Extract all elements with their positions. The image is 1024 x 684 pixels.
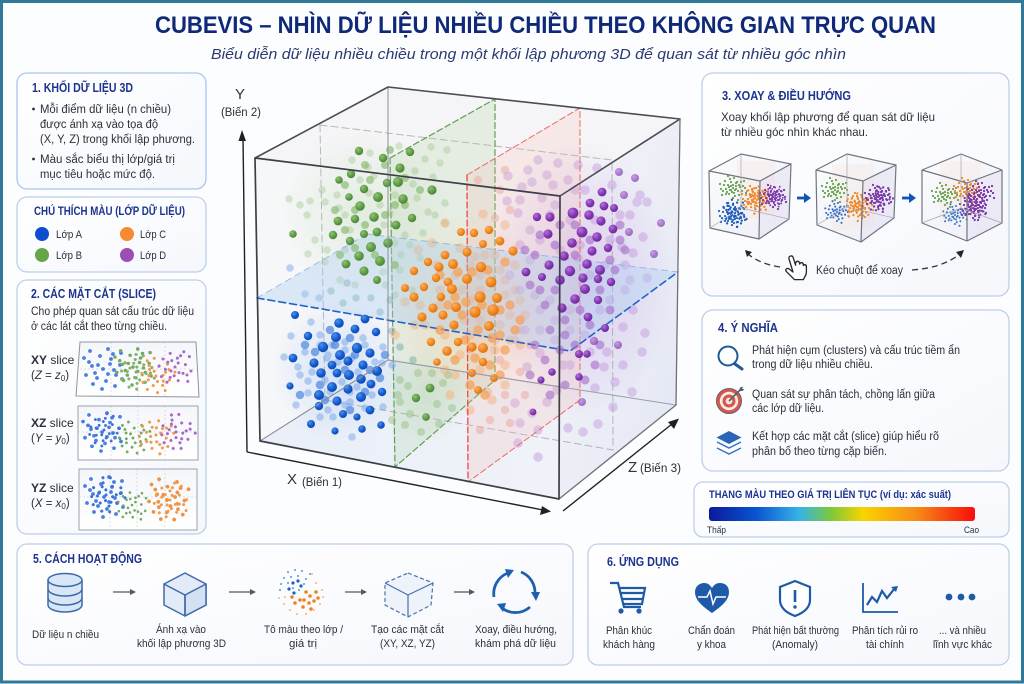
app text: more (933, 625, 992, 651)
YZ slice label: YZ slice (31, 481, 74, 495)
cluster: class B green (289, 147, 437, 421)
X axis label: (Biến 1) (302, 477, 342, 489)
legend: class D: Lớp D (140, 250, 166, 262)
XZ slice label: 0 (61, 437, 66, 446)
mini cube 2 (816, 154, 896, 242)
rotate description: Xoay khối lập phương để quan sát dữ liệu (721, 110, 935, 124)
XZ slice thumbnail (78, 406, 198, 460)
app text: medical: y khoa (697, 639, 727, 651)
text: find clusters: Phát hiện cụm (clusters) và cấu trúc tiềm ẩn (752, 345, 960, 357)
panel: continuous colour scale (694, 482, 1009, 537)
YZ slice label: (X = x (31, 498, 61, 510)
icon: heart (695, 583, 729, 613)
Y axis label: Y (235, 86, 245, 103)
panel: 4 meaning (702, 310, 1009, 471)
main chart: 3D data cube (221, 86, 681, 515)
rotate description: từ nhiều góc nhìn khác nhau. (721, 125, 868, 139)
XZ slice label: ) (66, 433, 70, 445)
rotate description (721, 110, 935, 139)
scale heading: THANG MÀU THEO GIÁ TRỊ LIÊN TỤC (ví dụ: xác suất) (709, 488, 951, 501)
app text: anomaly: Phát hiện bất thường (752, 625, 839, 637)
step text: map to cube: Ánh xạ vào (156, 623, 206, 636)
icon: shield (780, 581, 810, 616)
app text: anomaly (752, 625, 839, 651)
arrow: cube 1 to cube 2 (797, 193, 811, 203)
Z axis label: Z (628, 459, 637, 476)
dashed rear slice plane (320, 125, 613, 450)
step text: explore: khám phá dữ liệu (475, 638, 556, 650)
red slice plane (467, 108, 580, 482)
icon: cube (164, 573, 206, 616)
cluster: class C orange (401, 226, 518, 394)
dashed arrow right (912, 250, 964, 270)
bullet text: được ánh xạ vào tọa độ (40, 119, 158, 131)
mini cube 3 (922, 154, 1002, 241)
panel: 3 rotate and navigate (702, 73, 1009, 296)
colour bar (709, 507, 975, 521)
app text: finance: Phân tích rủi ro (852, 625, 918, 637)
panel: 2 slices (17, 280, 206, 534)
step text: colour: Tô màu theo lớp / (264, 624, 344, 636)
mini cube 1 (709, 154, 791, 239)
bullet text: Mỗi điểm dữ liệu (n chiều) (40, 103, 171, 116)
app text: more: ... và nhiều (939, 625, 986, 637)
app text: medical: Chẩn đoán (688, 625, 735, 637)
text: separation: Quan sát sự phân tách, chồng lấn giữa (752, 389, 936, 401)
text: find clusters: trong dữ liệu nhiều chiều. (752, 359, 873, 371)
slices description: Cho phép quan sát cấu trúc dữ liệu (31, 306, 194, 318)
heading: applications: 6. ỨNG DỤNG (607, 554, 679, 569)
arrow 2 (229, 589, 256, 595)
scale label low: Thấp (707, 525, 726, 536)
heading: how it works: 5. CÁCH HOẠT ĐỘNG (33, 551, 142, 566)
text: find clusters (752, 345, 960, 371)
arrow 3 (345, 589, 367, 595)
icon: cart (610, 583, 645, 614)
step text: map to cube: khối lập phương 3D (137, 638, 226, 650)
panel: 5 how it works (17, 544, 573, 665)
legend: class A (35, 227, 83, 241)
colour haze of clusters (270, 130, 675, 445)
step text: data: Dữ liệu n chiều (32, 629, 99, 641)
Z axis label (628, 459, 681, 476)
icon: target (716, 386, 744, 414)
icon: database (48, 574, 82, 612)
Z axis label: (Biến 3) (640, 463, 681, 475)
XY slice label: 0 (61, 374, 66, 383)
slices description (31, 306, 194, 333)
XY slice label: XY slice (31, 353, 75, 367)
panel: colour legend (17, 197, 206, 272)
app text: customers: khách hàng (603, 639, 655, 651)
step text: colour (264, 624, 344, 650)
icon: layers (716, 431, 742, 454)
cluster: class A blue (286, 311, 386, 435)
title: CUBEVIS – NHÌN DỮ LIỆU NHIỀU CHIỀU THEO KHÔNG GIAN TRỰC QUAN (155, 11, 936, 39)
icon: rotate cycle (494, 569, 540, 613)
legend: class B (35, 248, 82, 262)
bullet text: Màu sắc biểu thị lớp/giá trị (40, 153, 175, 166)
scale label high: Cao (964, 525, 979, 536)
icon: coloured point cloud (279, 570, 323, 614)
app text: finance: tài chính (866, 639, 904, 651)
legend: class B: Lớp B (56, 250, 82, 262)
app text: customers: Phân khúc (606, 625, 652, 637)
app text: more: lĩnh vực khác (933, 639, 992, 651)
dashed arrow left (745, 250, 780, 267)
legend: class C: Lớp C (140, 229, 166, 241)
subtitle: Biểu diễn dữ liệu nhiều chiều trong một khối lập phương 3D để quan sát từ nhiều góc nhìn (211, 46, 846, 63)
YZ slice label (31, 481, 74, 511)
arrow 1 (113, 589, 136, 595)
Y axis label: (Biến 2) (221, 107, 261, 119)
slices description: ở các lát cắt theo từng chiều. (31, 320, 167, 333)
step text: slices: (XY, XZ, YZ) (380, 638, 435, 650)
bullet text (32, 103, 195, 181)
panel: 1 data cube (17, 73, 206, 189)
step text: explore (475, 624, 557, 650)
step text: slices: Tạo các mặt cắt (371, 623, 444, 636)
legend: class A: Lớp A (56, 229, 83, 241)
Z axis (563, 418, 679, 511)
icon: hand cursor (786, 256, 806, 280)
step text: colour: giá trị (289, 638, 317, 650)
legend: class D (120, 248, 166, 262)
text: separation: các lớp dữ liệu. (752, 403, 824, 415)
Y axis (238, 130, 247, 452)
heading: data cube: 1. KHỐI DỮ LIỆU 3D (32, 80, 133, 95)
step text: explore: Xoay, điều hướng, (475, 624, 557, 636)
bullet text: mục tiêu hoặc mức độ. (40, 169, 155, 181)
text: combine slices: phân bố theo từng cặp biến. (752, 446, 887, 458)
text: separation (752, 389, 936, 415)
YZ slice label: 0 (61, 502, 66, 511)
X axis (247, 452, 551, 515)
icon: more dots (946, 594, 975, 600)
XY slice label: (Z = z (31, 370, 61, 382)
step text: map to cube (137, 623, 226, 650)
X axis label (287, 471, 342, 489)
XY slice label: ) (65, 370, 69, 382)
YZ slice label: ) (66, 498, 70, 510)
XZ slice label: XZ slice (31, 416, 74, 430)
step text: slices (371, 623, 444, 650)
heading: meaning: 4. Ý NGHĨA (718, 320, 778, 335)
XZ slice label (31, 416, 74, 446)
app text: finance (852, 625, 918, 651)
Y axis label (221, 86, 261, 119)
panel: 6 applications (588, 544, 1009, 665)
cluster: class D purple (522, 188, 618, 415)
cube back faces (255, 87, 680, 499)
text: combine slices (752, 430, 939, 458)
heading: rotate: 3. XOAY & ĐIỀU HƯỚNG (722, 88, 851, 103)
arrow: cube 2 to cube 3 (902, 193, 916, 203)
icon: line chart (863, 583, 898, 612)
icon: magnifier (718, 346, 742, 369)
XY slice label (31, 353, 75, 383)
app text: customers (603, 625, 655, 651)
mid-depth data points (300, 150, 625, 410)
drag caption: Kéo chuột để xoay (816, 265, 903, 277)
arrow 4 (454, 589, 475, 595)
faint far data points (284, 146, 647, 457)
blue slice plane (257, 234, 678, 351)
X axis label: X (287, 471, 297, 488)
legend heading: CHÚ THÍCH MÀU (LỚP DỮ LIỆU) (34, 205, 185, 218)
legend: class C (120, 227, 166, 241)
heading: slices: 2. CÁC MẶT CẮT (SLICE) (31, 286, 156, 301)
app text: medical (688, 625, 735, 651)
text: combine slices: Kết hợp các mặt cắt (slice) giúp hiểu rõ (752, 430, 939, 443)
icon: dashed cube (385, 573, 433, 617)
app text: anomaly: (Anomaly) (772, 639, 818, 651)
outlying purple points (578, 168, 665, 406)
XZ slice label: (Y = y (31, 433, 61, 445)
cube front edges (255, 87, 680, 499)
XY slice thumbnail (76, 342, 199, 397)
green slice plane (390, 99, 495, 467)
bullet text: (X, Y, Z) trong khối lập phương. (40, 134, 195, 146)
YZ slice thumbnail (79, 469, 197, 530)
